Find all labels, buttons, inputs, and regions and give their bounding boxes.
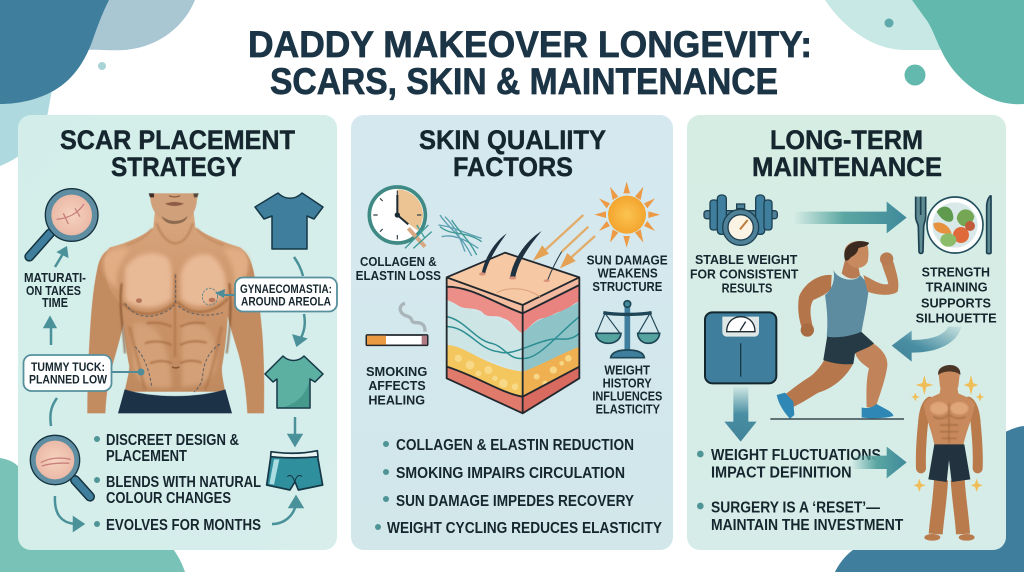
label: weight history influences elasticity: HISTORY xyxy=(603,376,652,391)
muscle shading xyxy=(103,248,249,388)
icon: dumbbell with stopwatch xyxy=(704,195,777,245)
label: sun damage: STRUCTURE xyxy=(592,279,663,294)
title: SCARS, SKIN & MAINTENANCE xyxy=(270,61,778,102)
icon: magnifier on chest scar xyxy=(29,189,98,257)
bullet list: maintenance: WEIGHT FLUCTUATIONS xyxy=(711,447,881,464)
label: strength training: TRAINING xyxy=(926,280,988,295)
label: sun damage xyxy=(587,252,668,294)
shorts xyxy=(823,331,874,364)
bullet list: maintenance: SURGERY IS A ‘RESET’— xyxy=(711,499,880,516)
front arm xyxy=(863,262,898,295)
label: weight history influences elasticity xyxy=(592,362,663,417)
figure: fit man with sparkles xyxy=(911,365,984,541)
face crop xyxy=(150,193,197,222)
head xyxy=(844,241,868,268)
heading: long-term maintenance: MAINTENANCE xyxy=(752,152,942,182)
background blob: top right teal xyxy=(912,0,1024,104)
icon: plate with fork and knife xyxy=(916,196,991,254)
icon: magnifier on abdominal scar xyxy=(31,436,90,497)
neck xyxy=(842,260,860,279)
bullet list: scar placement: EVOLVES FOR MONTHS xyxy=(106,517,261,534)
label: stable weight: STABLE WEIGHT xyxy=(695,252,797,267)
label: sun damage: SUN DAMAGE xyxy=(587,252,668,267)
label: maturation takes time: MATURATI- xyxy=(24,270,86,285)
shoes xyxy=(777,393,794,419)
panel: long-term maintenance xyxy=(687,115,1006,550)
heading: long-term maintenance: LONG-TERM xyxy=(770,125,923,155)
callout: tummy tuck: PLANNED LOW xyxy=(29,372,108,386)
callout: gynaecomastia: GYNAECOMASTIA: xyxy=(240,282,332,296)
icon: sun with rays xyxy=(594,182,660,248)
figure: running man xyxy=(777,241,898,419)
label: weight history influences elasticity: INFLUENCES xyxy=(592,389,663,404)
bullet list: scar placement: COLOUR CHANGES xyxy=(106,490,231,507)
heading: scar placement strategy: SCAR PLACEMENT xyxy=(60,125,295,155)
bullet list: skin quality xyxy=(375,437,662,537)
background blob: top right pale teal xyxy=(825,0,940,50)
arms xyxy=(921,402,978,468)
icon: green t-shirt xyxy=(265,356,323,408)
back arm xyxy=(798,275,832,327)
icon: blue t-shirt xyxy=(255,193,323,249)
icon: boxer shorts xyxy=(267,451,323,490)
label: collagen and elastin loss: COLLAGEN & xyxy=(360,254,437,269)
label: strength training: STRENGTH xyxy=(922,265,990,280)
heading: scar placement strategy xyxy=(60,125,295,182)
label: smoking affects healing: HEALING xyxy=(368,392,425,407)
label: stable weight xyxy=(690,252,798,296)
bullet list: skin quality: COLLAGEN & ELASTIN REDUCTION xyxy=(396,437,634,454)
label: strength training: SILHOUETTE xyxy=(916,310,997,325)
label: collagen and elastin loss: ELASTIN LOSS xyxy=(356,268,441,283)
label: stable weight: FOR CONSISTENT xyxy=(690,266,798,281)
arrows: right cycle xyxy=(272,257,305,524)
title: DADDY MAKEOVER LONGEVITY: xyxy=(248,24,812,65)
bullet list: skin quality: WEIGHT CYCLING REDUCES ELASTICITY xyxy=(387,520,662,537)
background blob: top left dark teal xyxy=(0,0,109,104)
icon: balance scale xyxy=(596,301,660,358)
torso xyxy=(924,385,975,445)
torso photo illustration with scar lines xyxy=(87,193,264,413)
bullet list: maintenance: MAINTAIN THE INVESTMENT xyxy=(711,517,904,534)
ground line xyxy=(770,417,904,421)
label: strength training: SUPPORTS xyxy=(921,295,991,310)
diagram: skin cross-section cube xyxy=(447,231,579,413)
arrow: dumbbell to plate xyxy=(793,202,907,233)
heading: long-term maintenance xyxy=(752,125,942,182)
front leg xyxy=(853,343,887,407)
icon: cigarette with smoke xyxy=(366,303,428,345)
bullet list: maintenance xyxy=(697,447,904,534)
background blob: bottom left xyxy=(0,458,185,572)
bullet list: maintenance: IMPACT DEFINITION xyxy=(711,465,852,482)
heading: scar placement strategy: STRATEGY xyxy=(111,152,242,182)
label: sun damage: WEAKENS xyxy=(598,266,658,281)
label: smoking affects healing: SMOKING xyxy=(366,364,427,379)
bullet list: scar placement xyxy=(94,432,261,534)
label: smoking affects healing xyxy=(366,364,427,407)
heading: skin quality factors: FACTORS xyxy=(453,152,573,182)
icon: bathroom scale xyxy=(705,312,776,383)
arrow: scale down xyxy=(724,387,757,442)
sun ray arrows xyxy=(536,215,595,266)
label: collagen and elastin loss xyxy=(356,254,441,283)
label: stable weight: RESULTS xyxy=(722,281,772,296)
illustrations in zoomed coordinates xyxy=(356,182,668,417)
background blob: top left light blue xyxy=(0,0,195,166)
label: maturation takes time: ON TAKES xyxy=(26,283,81,298)
sparkles xyxy=(911,375,984,492)
arrows: left cycle xyxy=(45,248,83,530)
background blob: bottom right xyxy=(835,426,1024,572)
label: strength training xyxy=(916,265,997,325)
head xyxy=(938,365,960,392)
label: smoking affects healing: AFFECTS xyxy=(368,378,426,393)
bullet list: skin quality: SMOKING IMPAIRS CIRCULATION xyxy=(396,465,625,482)
icon: clock with collagen fibres xyxy=(369,187,482,256)
back leg xyxy=(784,358,853,407)
callout: gynaecomastia xyxy=(215,278,337,312)
label: maturation takes time: TIME xyxy=(42,295,68,310)
panel: scar placement strategy xyxy=(18,115,337,550)
decorative dot: top left xyxy=(98,62,106,70)
bullet list: scar placement: PLACEMENT xyxy=(106,448,187,465)
singlet xyxy=(825,269,869,337)
decorative dots: top right xyxy=(884,18,926,86)
bullet list: scar placement: BLENDS WITH NATURAL xyxy=(106,474,261,491)
arrow: to fit man xyxy=(852,447,907,478)
title xyxy=(248,24,812,102)
legs xyxy=(936,480,963,534)
shorts xyxy=(928,444,970,482)
callout: tummy tuck xyxy=(24,355,144,391)
dashed scar lines xyxy=(125,275,223,392)
label: weight history influences elasticity: ELASTICITY xyxy=(596,402,660,417)
bullet list: scar placement: DISCREET DESIGN & xyxy=(106,432,239,449)
shorts xyxy=(118,389,232,413)
panel: skin quality factors xyxy=(351,115,673,550)
label: maturation takes time xyxy=(24,270,86,310)
heading: skin quality factors xyxy=(419,125,606,182)
callout: gynaecomastia: AROUND AREOLA xyxy=(241,294,331,308)
callout: tummy tuck: TUMMY TUCK: xyxy=(31,360,105,374)
label: weight history influences elasticity: WEIGHT xyxy=(604,362,650,377)
bullet list: skin quality: SUN DAMAGE IMPEDES RECOVERY xyxy=(396,493,634,510)
heading: skin quality factors: SKIN QUALIITY xyxy=(419,125,606,155)
arrow: curved return xyxy=(892,327,962,362)
